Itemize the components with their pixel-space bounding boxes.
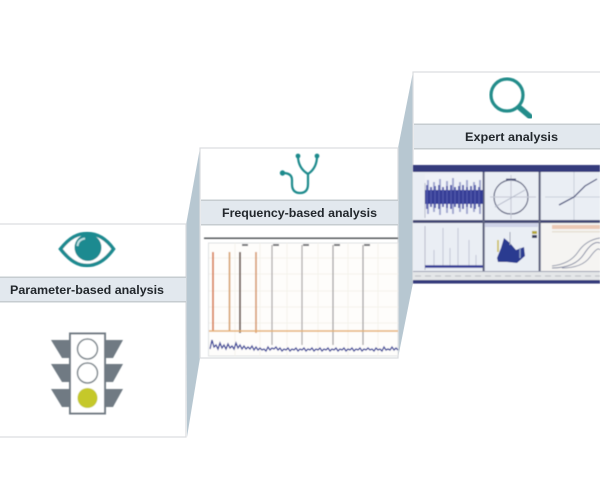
chart: frequency spectrum bbox=[204, 238, 398, 356]
trend plot bbox=[545, 172, 600, 220]
panel: parameter-based analysis bbox=[0, 224, 186, 437]
chart: expert dashboard bbox=[413, 165, 600, 284]
icon: magnifying glass bbox=[491, 79, 530, 116]
polar plot bbox=[490, 175, 536, 219]
heading band: expert analysis: Expert analysis bbox=[465, 132, 558, 144]
heading band: parameter-based analysis bbox=[0, 276, 186, 302]
icon: stethoscope bbox=[281, 155, 318, 193]
side strip: between panels two and three bbox=[398, 72, 413, 358]
side strip: between panels one and two bbox=[186, 148, 200, 437]
panel: frequency-based analysis bbox=[200, 148, 398, 358]
heading band: frequency-based analysis: Frequency-based analysis bbox=[222, 208, 377, 220]
time axis strip bbox=[415, 275, 600, 277]
icon: traffic light bbox=[51, 334, 123, 414]
heading band: parameter-based analysis: Parameter-based analysis bbox=[10, 285, 164, 297]
curves plot bbox=[541, 223, 600, 271]
panel: expert analysis bbox=[413, 72, 600, 284]
heading band: expert analysis bbox=[414, 124, 600, 150]
spectrum plot bbox=[425, 226, 483, 270]
icon: eye bbox=[60, 234, 114, 266]
time signal plot bbox=[425, 174, 483, 219]
heading band: frequency-based analysis bbox=[201, 200, 398, 226]
waterfall 3D plot bbox=[485, 223, 538, 263]
